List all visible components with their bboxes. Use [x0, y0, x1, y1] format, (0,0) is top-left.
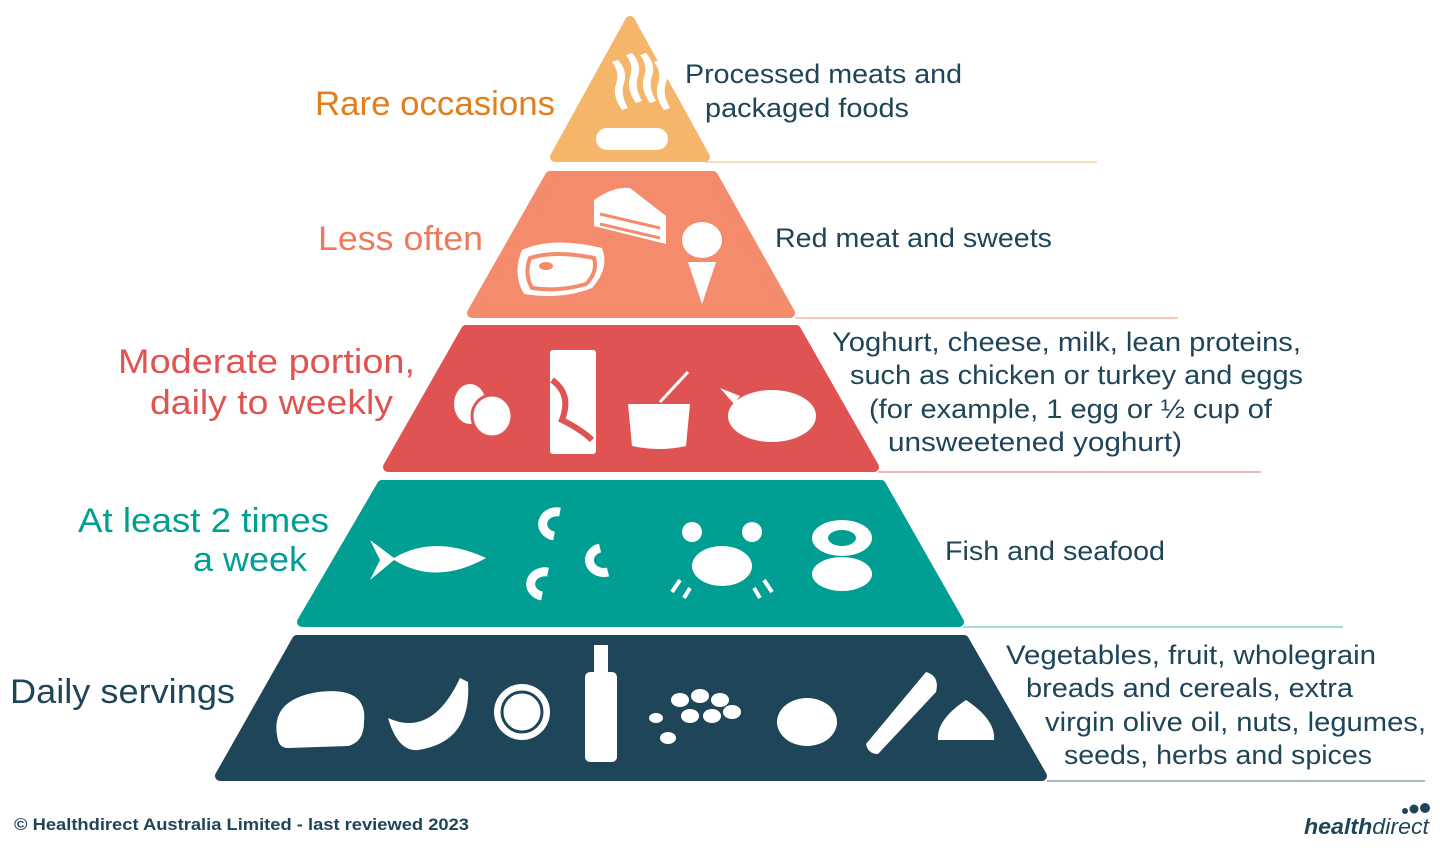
- heading: rare occasions: Rare occasions: [315, 85, 555, 123]
- text: processed meats: [685, 59, 962, 123]
- logo: [1304, 803, 1430, 839]
- icon: bread: [276, 691, 364, 748]
- text: daily foods: Vegetables, fruit, wholegrain: [1006, 640, 1376, 670]
- text: processed meats: Processed meats and: [685, 59, 962, 89]
- text: dairy and proteins: such as chicken or turkey and eggs: [850, 360, 1303, 390]
- icon: ice cream: [682, 222, 722, 304]
- text: daily foods: [1006, 640, 1426, 770]
- tier 3: moderate portion: [388, 330, 1261, 472]
- heading: moderate portion: daily to weekly: [150, 384, 393, 422]
- icon: crab: [672, 522, 772, 598]
- text: processed meats: packaged foods: [705, 93, 909, 123]
- footer: © Healthdirect Australia Limited - last reviewed 2023: [14, 815, 469, 834]
- icon: eggs: [454, 384, 512, 437]
- heading: moderate portion: Moderate portion,: [118, 343, 415, 381]
- icon: orange slice: [494, 684, 550, 740]
- icon: banana: [388, 678, 468, 750]
- text: daily foods: seeds, herbs and spices: [1064, 740, 1372, 770]
- icon: chicken: [720, 388, 816, 442]
- icon: yoghurt cup: [628, 372, 690, 449]
- icon: milk carton: [550, 350, 596, 454]
- icon: garlic: [938, 700, 994, 740]
- heading: at least 2 times: [78, 502, 329, 579]
- text: daily foods: breads and cereals, extra: [1026, 673, 1354, 703]
- tier 4: at least 2 times a week: [302, 485, 1343, 627]
- text: red meat: Red meat and sweets: [775, 223, 1052, 253]
- text: dairy and proteins: Yoghurt, cheese, milk, lean proteins,: [832, 327, 1301, 357]
- text: fish: Fish and seafood: [945, 536, 1165, 566]
- heading: at least 2 times: a week: [193, 541, 308, 579]
- tier 2: less often: [472, 176, 1178, 318]
- heading: daily servings: Daily servings: [10, 673, 235, 711]
- icon: olive oil bottle: [585, 645, 617, 762]
- logo: healthdirect: [1304, 814, 1430, 839]
- icon: tomato: [777, 698, 837, 746]
- icon: nuts: [649, 689, 741, 744]
- icon: cake: [594, 188, 666, 244]
- icon: oysters: [812, 520, 872, 591]
- icon: prawns: [531, 512, 608, 596]
- icon: steak: [517, 242, 604, 296]
- text: dairy and proteins: [832, 327, 1303, 457]
- tier 1: rare occasions: [555, 21, 1097, 162]
- text: daily foods: virgin olive oil, nuts, legumes,: [1045, 707, 1426, 737]
- icon: fish: [370, 540, 486, 580]
- heading: moderate portion: [118, 343, 415, 422]
- tier 5: daily servings: [220, 640, 1425, 781]
- icon: bacon and sausage: [596, 53, 670, 150]
- heading: less often: Less often: [318, 220, 483, 258]
- heading: at least 2 times: At least 2 times: [78, 502, 329, 540]
- text: dairy and proteins: unsweetened yoghurt): [888, 427, 1182, 457]
- icon: corn: [866, 672, 937, 754]
- text: dairy and proteins: (for example, 1 egg or ½ cup of: [869, 394, 1273, 424]
